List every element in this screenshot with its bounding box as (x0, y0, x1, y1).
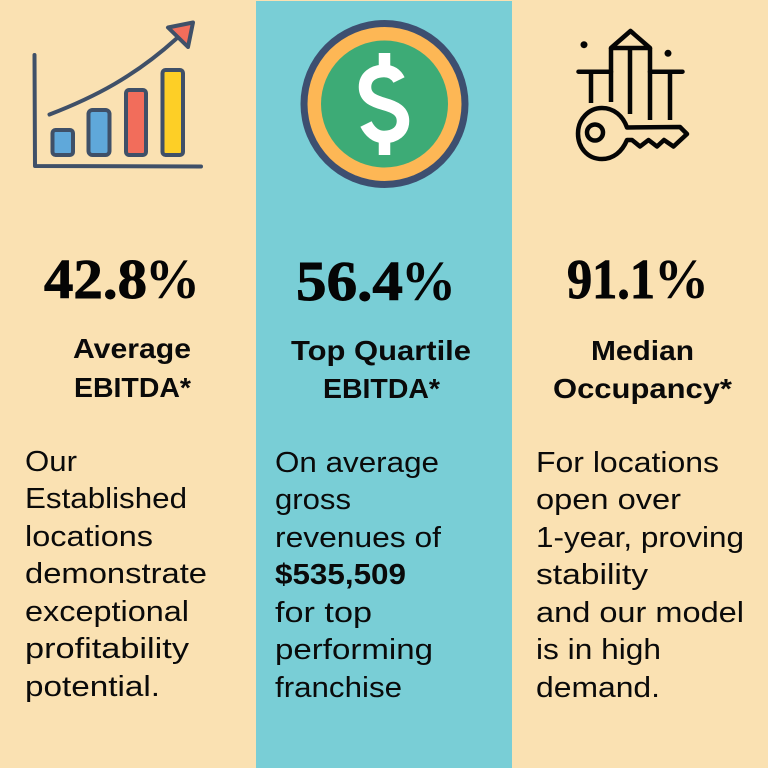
text block: locations open over 1-year: open over (536, 484, 681, 516)
text block: established locations: demonstrate (25, 558, 207, 590)
stat: 91.1%: % (654, 249, 709, 311)
heading: Median Occupancy: Occupancy* (553, 373, 732, 404)
heading: Average EBITDA: EBITDA* (74, 372, 191, 403)
text block: gross revenues (275, 447, 442, 704)
text block: gross revenues: revenues of (275, 522, 442, 554)
text block: gross revenues: $535,509 (275, 559, 406, 591)
panel background: teal column (256, 1, 512, 768)
text block: gross revenues: performing (275, 634, 433, 666)
icon: dollar coin (300, 20, 468, 188)
text block: established locations: potential. (25, 671, 160, 703)
stat: 42.8% (44, 249, 200, 311)
icon: rising bar chart (34, 22, 201, 166)
text block: established locations: Our (25, 446, 77, 478)
heading: Average EBITDA: Average (73, 333, 191, 364)
text block: gross revenues: franchise (275, 672, 402, 704)
heading: Top Quartile EBITDA: EBITDA* (323, 373, 440, 404)
stat: 56.4%: % (401, 251, 456, 313)
panel: top quartile EBITDA (256, 1, 512, 768)
text block: locations open over 1-year: For locations (536, 447, 719, 479)
heading: Median Occupancy: Median (591, 335, 694, 366)
heading: Top Quartile EBITDA (291, 335, 471, 404)
stat: 91.1%: 91.1 (567, 249, 655, 311)
text block: established locations: exceptional (25, 596, 189, 628)
text block: locations open over 1-year (536, 447, 744, 704)
text block: locations open over 1-year: and our model (536, 597, 744, 629)
text block: gross revenues: for top (275, 597, 372, 629)
text block: locations open over 1-year: is in high (536, 634, 661, 666)
stat: 56.4%: 56.4 (296, 251, 403, 313)
panel: average EBITDA (25, 22, 207, 703)
heading: Top Quartile EBITDA: Top Quartile (291, 335, 471, 366)
text block: gross revenues: On average (275, 447, 439, 479)
text block: gross revenues: gross (275, 484, 351, 516)
panel: median occupancy (536, 31, 744, 704)
icon: building and key (578, 31, 687, 159)
stat: 42.8%: 42.8 (44, 249, 147, 311)
text block: locations open over 1-year: demand. (536, 672, 660, 704)
heading: Median Occupancy (553, 335, 732, 404)
text block: established locations: profitability (25, 633, 190, 665)
text block: locations open over 1-year: stability (536, 559, 649, 591)
text block: locations open over 1-year: 1-year, proving (536, 522, 744, 554)
stat: 42.8%: % (145, 249, 200, 311)
text block: established locations: Established (25, 483, 187, 515)
text block: established locations (25, 446, 207, 703)
stat: 91.1% (567, 249, 709, 311)
heading: Average EBITDA (73, 333, 191, 403)
text block: established locations: locations (25, 521, 153, 553)
stat: 56.4% (296, 251, 456, 313)
